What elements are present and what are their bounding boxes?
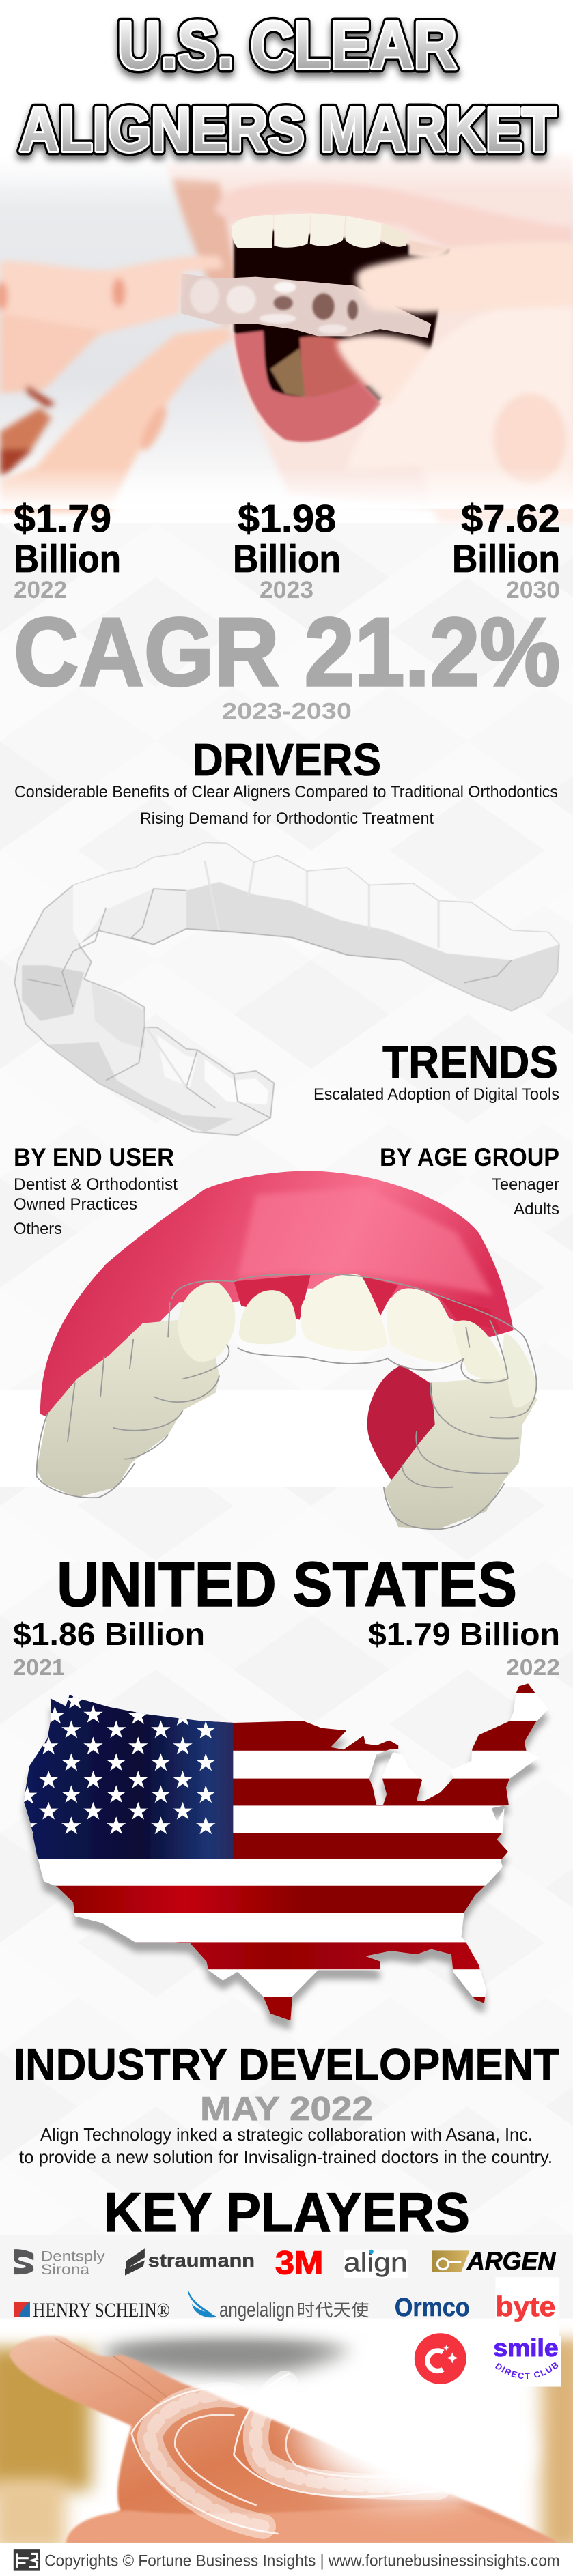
market value 2030: Billion <box>452 537 560 581</box>
market value 2030: 2030 <box>506 577 560 603</box>
market value 2030 <box>452 497 560 603</box>
title <box>19 8 556 164</box>
photo: hand holding aligners <box>0 2319 573 2551</box>
US value 2022: $1.79 Billion <box>368 1616 560 1652</box>
market value 2022: Billion <box>14 537 121 581</box>
development text: to provide a new solution for Invisalign-trained doctors in the country. <box>19 2147 553 2167</box>
footer <box>0 2543 573 2576</box>
logo: Align: align <box>344 2248 408 2277</box>
market value 2022: 2022 <box>14 577 67 603</box>
market value 2030: $7.62 <box>461 497 560 541</box>
illustration: clear aligner tray <box>14 843 559 1135</box>
united states heading: UNITED STATES <box>57 1549 517 1620</box>
development text: Align Technology inked a strategic collaboration with Asana, Inc. <box>40 2124 533 2145</box>
trends heading: TRENDS <box>382 1037 558 1088</box>
logo: Smile Direct Club: smile <box>493 2334 559 2362</box>
end user list: Owned Practices <box>14 1195 137 1214</box>
CAGR period: 2023-2030 <box>222 698 352 724</box>
driver 2: Rising Demand for Orthodontic Treatment <box>140 810 434 828</box>
age group list: Adults <box>514 1200 559 1218</box>
logo: Argen: ARGEN <box>466 2247 556 2275</box>
market value 2022: $1.79 <box>14 497 111 541</box>
logo: Henry Schein: HENRY SCHEIN® <box>33 2300 170 2321</box>
logo: Byte <box>496 2277 559 2342</box>
end user list <box>14 1175 178 1238</box>
driver 1: Considerable Benefits of Clear Aligners Compared to Traditional Orthodontics <box>14 783 558 801</box>
logo: Byte: byte <box>496 2291 555 2322</box>
logo: Smile Direct Club <box>493 2334 561 2386</box>
logo: Straumann <box>125 2248 255 2276</box>
development text <box>19 2124 553 2167</box>
drivers heading: DRIVERS <box>193 734 381 786</box>
aligner edge <box>37 1274 537 1529</box>
US value 2022: 2022 <box>506 1655 560 1680</box>
age group list <box>492 1175 559 1218</box>
end user list: Others <box>14 1220 62 1238</box>
logo: Smile Direct Club: DIRECT CLUB <box>495 2362 559 2379</box>
logo: Straumann: straumann <box>148 2250 255 2271</box>
key players heading: KEY PLAYERS <box>104 2182 470 2244</box>
aligners on palm <box>132 2374 438 2534</box>
title line 1: U.S. CLEAR <box>117 8 457 83</box>
logo: Candid <box>415 2333 466 2384</box>
background pattern lower <box>0 1487 573 2235</box>
logo: Angelalign: 时代天使 <box>296 2301 369 2320</box>
trend item: Escalated Adoption of Digital Tools <box>313 1085 559 1104</box>
front teeth <box>178 1274 537 1408</box>
left hand <box>0 256 223 348</box>
logo: Angelalign <box>188 2291 369 2321</box>
upper teeth <box>232 213 409 248</box>
market value 2023: Billion <box>233 537 341 581</box>
right hand <box>347 301 573 522</box>
illustration: teeth with gums and aligner <box>37 1171 537 1529</box>
industry development heading: INDUSTRY DEVELOPMENT <box>14 2040 559 2089</box>
logo: Dentsply Sirona: Sirona <box>41 2261 90 2278</box>
by end user heading: BY END USER <box>14 1143 174 1171</box>
key player logos <box>14 2245 561 2386</box>
age group list: Teenager <box>492 1175 559 1194</box>
logo: Dentsply Sirona: Dentsply <box>41 2248 105 2265</box>
map of the United States with flag <box>0 1676 573 2031</box>
aligner in fingers <box>181 274 431 338</box>
logos band <box>0 2235 573 2319</box>
footer logo <box>14 2549 40 2571</box>
market value 2023 <box>233 497 341 603</box>
background pattern upper <box>0 523 573 1390</box>
market value 2023: $1.98 <box>238 497 336 541</box>
end user list: Dentist & Orthodontist <box>14 1175 178 1194</box>
logo: Ormco: Ormco <box>395 2293 470 2322</box>
US value 2022 <box>368 1616 560 1680</box>
logo: Angelalign: angelalign <box>219 2298 294 2321</box>
market value 2023: 2023 <box>260 577 313 603</box>
development date: MAY 2022 <box>200 2091 373 2128</box>
title line 1: U.S. CLEAR <box>117 8 457 83</box>
US value 2021: 2021 <box>13 1655 65 1680</box>
logo: Dentsply Sirona <box>14 2248 105 2278</box>
US value 2021 <box>13 1616 205 1680</box>
US value 2021: $1.86 Billion <box>13 1616 205 1652</box>
title line 1: U.S. CLEAR <box>117 8 457 83</box>
hero photo: woman inserting clear aligner <box>0 0 573 522</box>
logo: 3M: 3M <box>275 2245 324 2281</box>
market value 2022 <box>14 497 121 603</box>
by age group heading: BY AGE GROUP <box>380 1143 559 1171</box>
back and side teeth <box>37 1320 219 1498</box>
